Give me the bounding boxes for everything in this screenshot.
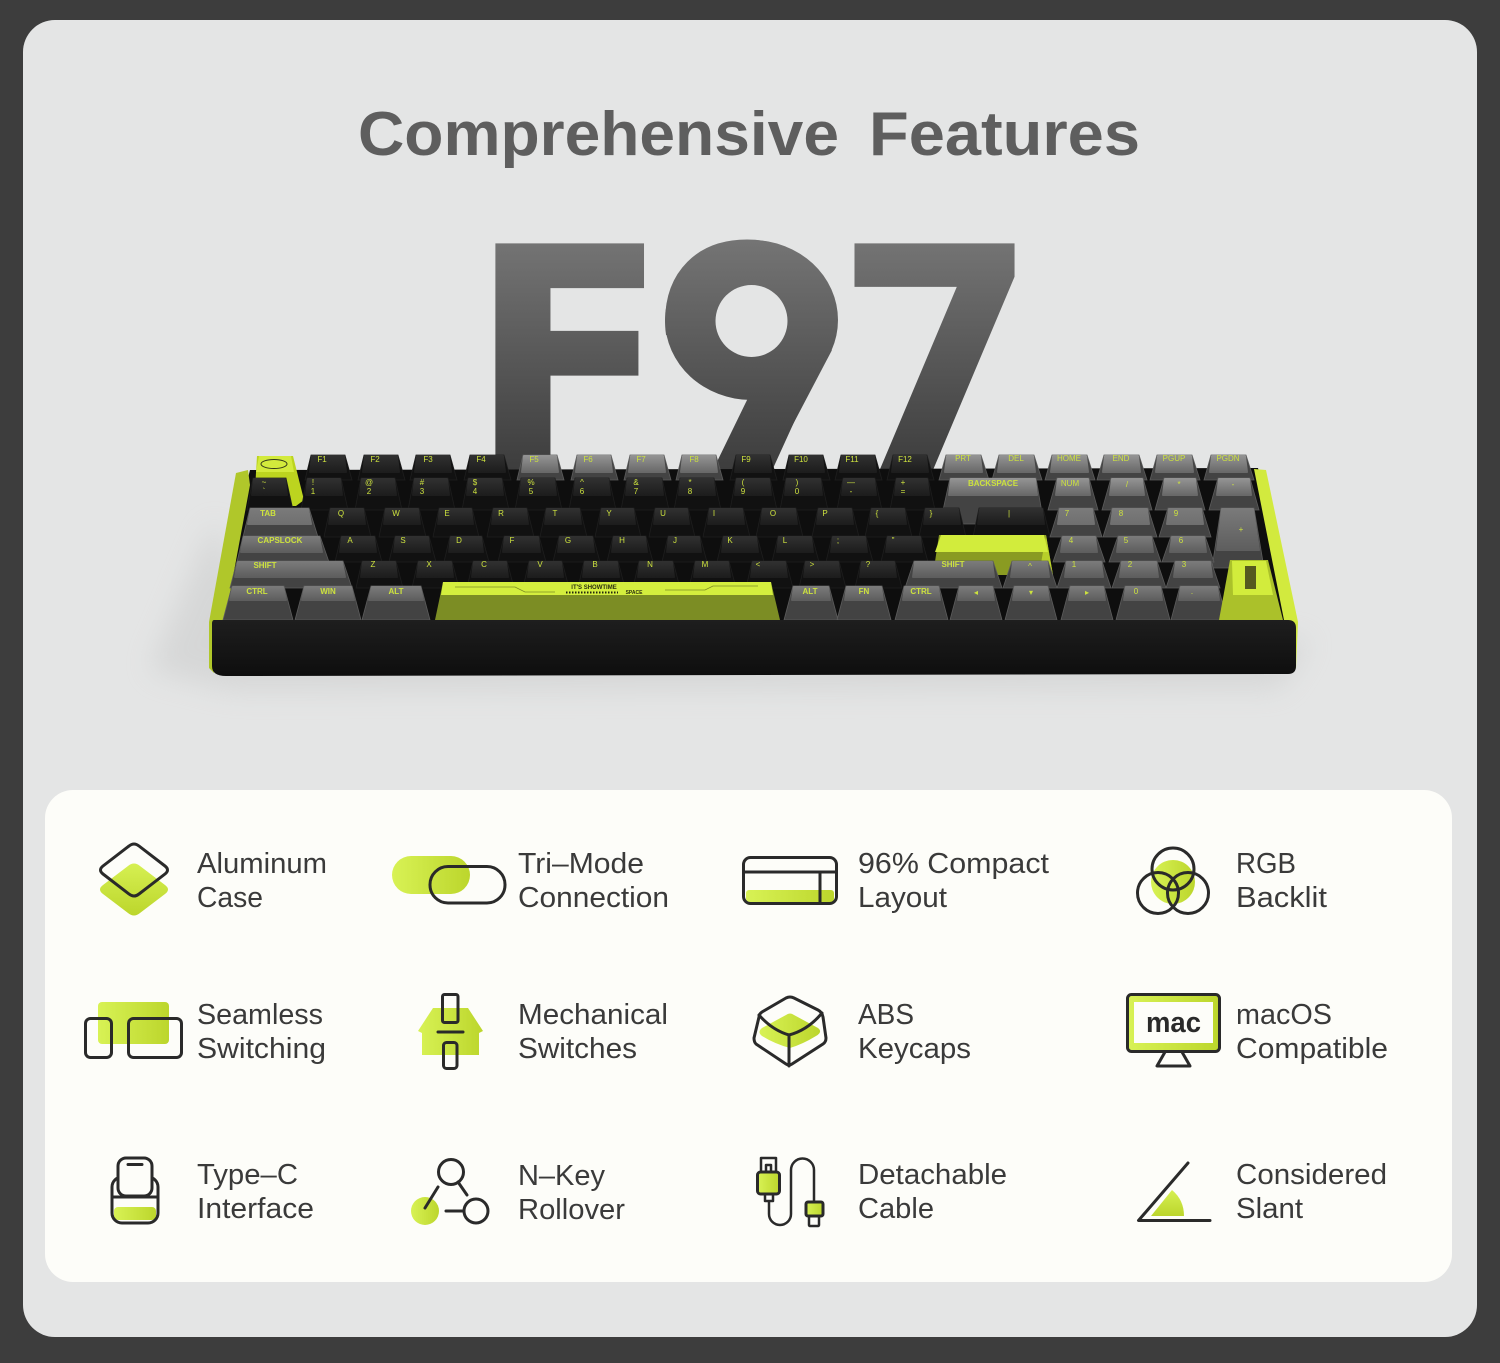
feature: Type-C Interface: [112, 1158, 314, 1225]
icon: overlapping circles: [1138, 848, 1208, 914]
keyboard front edge: [212, 620, 1296, 676]
function row keys: F5: [529, 455, 539, 464]
home row keys: J: [673, 536, 677, 545]
QWERTY row keys: 9: [1174, 509, 1179, 518]
bottom alpha row keys: >: [810, 560, 815, 569]
bottom alpha row keys: 1: [1072, 560, 1077, 569]
bottom row keys: ALT: [803, 587, 818, 596]
bottom row keys: 0: [1134, 587, 1139, 596]
bottom alpha row keys: 3: [1182, 560, 1187, 569]
number row keys: 4: [473, 487, 478, 496]
feature: Seamless Switching: [86, 999, 326, 1065]
home row keys: ;: [837, 536, 839, 545]
number row keys: ^: [580, 478, 584, 487]
number row keys: &: [633, 478, 639, 487]
label: Connection: [518, 882, 669, 914]
icon: keyboard layout: [744, 858, 836, 904]
number row keys: 9: [741, 487, 746, 496]
keyboard shadow: [150, 520, 1310, 690]
label: [518, 1160, 625, 1226]
QWERTY row keys: U: [660, 509, 666, 518]
icon: connected nodes: [411, 1160, 488, 1225]
model name: F97: [468, 180, 1038, 548]
bottom alpha row keys: <: [756, 560, 761, 569]
label: Interface: [197, 1193, 314, 1225]
number row keys: (: [742, 478, 745, 487]
label: ABS: [858, 999, 914, 1031]
home row keys: D: [456, 536, 462, 545]
label: Type–C: [197, 1159, 298, 1191]
label: Backlit: [1236, 882, 1327, 914]
bottom alpha row keys: C: [481, 560, 487, 569]
icon: stacked layers: [100, 844, 168, 916]
label: [1236, 999, 1388, 1065]
QWERTY row keys: 7: [1065, 509, 1070, 518]
bottom row keys: WIN: [320, 587, 336, 596]
bottom alpha row keys: SHIFT: [941, 560, 965, 569]
number row keys: BACKSPACE: [968, 479, 1019, 488]
number row keys: 8: [688, 487, 693, 496]
bottom alpha row keys: Z: [371, 560, 376, 569]
function row keys: DEL: [1008, 454, 1024, 463]
number row keys: NUM: [1061, 479, 1079, 488]
icon: mac monitor: mac: [1146, 1007, 1201, 1039]
number row keys: —: [847, 478, 855, 487]
keyboard illustration: [150, 454, 1310, 690]
label: Slant: [1236, 1193, 1303, 1225]
label: Detachable: [858, 1159, 1007, 1191]
function row keys: HOME: [1057, 454, 1081, 463]
label: Compatible: [1236, 1033, 1388, 1065]
numpad enter key: [1219, 560, 1283, 620]
label: [518, 999, 668, 1065]
QWERTY row keys: P: [822, 509, 828, 518]
QWERTY row keys: |: [1008, 509, 1010, 518]
function row keys: F1: [317, 455, 327, 464]
label: Cable: [858, 1193, 934, 1225]
function row keys: F6: [583, 455, 593, 464]
number row keys: #: [420, 478, 425, 487]
label: [858, 999, 971, 1065]
label: Aluminum: [197, 848, 327, 880]
QWERTY row keys: O: [770, 509, 776, 518]
bottom row keys: ▸: [1085, 588, 1089, 597]
home row keys: L: [783, 536, 788, 545]
number row keys: *: [688, 478, 692, 487]
function row keys: F3: [423, 455, 433, 464]
home row keys: A: [347, 536, 353, 545]
number row keys: ~: [262, 478, 267, 487]
label: Case: [197, 882, 263, 914]
QWERTY row keys: [243, 508, 1264, 568]
label: Switching: [197, 1033, 326, 1065]
number row keys: [247, 478, 1259, 532]
QWERTY row keys: R: [498, 509, 504, 518]
icon: USB-C plug: [112, 1158, 158, 1223]
home row keys: [237, 535, 1214, 575]
bottom alpha row keys: B: [592, 560, 598, 569]
number row keys: %: [527, 478, 535, 487]
function row keys: PGDN: [1216, 454, 1240, 463]
function row keys: F12: [898, 455, 912, 464]
QWERTY row keys: 8: [1119, 509, 1124, 518]
bottom row keys: CTRL: [246, 587, 268, 596]
home row keys: S: [400, 536, 406, 545]
label: Switches: [518, 1033, 637, 1065]
model name: F97: 9: [650, 180, 853, 548]
panel: features: [45, 790, 1452, 1282]
feature: Mechanical Switches: [418, 994, 668, 1068]
QWERTY row keys: I: [713, 509, 715, 518]
bottom alpha row keys: [230, 560, 1220, 588]
label: RGB: [1236, 848, 1296, 880]
label: [858, 848, 1049, 914]
home row keys: 6: [1179, 536, 1184, 545]
home row keys: ": [892, 536, 895, 545]
function row keys: F4: [476, 455, 486, 464]
feature: Considered Slant: [1138, 1159, 1387, 1225]
feature: N-Key Rollover: [411, 1160, 625, 1226]
label: [197, 1159, 314, 1225]
spacebar: [435, 582, 780, 620]
number row keys: 1: [311, 487, 316, 496]
QWERTY row keys: T: [553, 509, 558, 518]
label: Keycaps: [858, 1033, 971, 1065]
number row keys: `: [263, 487, 266, 496]
feature: Tri-Mode Connection: [392, 848, 669, 914]
bottom alpha row keys: SHIFT: [253, 561, 277, 570]
label: [518, 848, 669, 914]
label: [1236, 848, 1327, 914]
title: Comprehensive: [358, 100, 839, 169]
function row keys: F9: [741, 455, 751, 464]
bottom alpha row keys: 2: [1128, 560, 1133, 569]
function row keys: F8: [689, 455, 699, 464]
model name: F97: F: [468, 181, 669, 548]
function row keys: END: [1113, 454, 1130, 463]
QWERTY row keys: Q: [338, 509, 344, 518]
QWERTY row keys: TAB: [260, 509, 276, 518]
number row keys: 5: [529, 487, 534, 496]
function row keys: F10: [794, 455, 808, 464]
bottom row keys: ▾: [1029, 588, 1033, 597]
QWERTY row keys: W: [392, 509, 400, 518]
label: Considered: [1236, 1159, 1387, 1191]
bottom alpha row keys: M: [702, 560, 709, 569]
spacebar: SPACE: [626, 590, 643, 596]
function row keys: PGUP: [1163, 454, 1185, 463]
number row keys: 0: [795, 487, 800, 496]
icon: toggle: [392, 856, 505, 903]
label: N–Key: [518, 1160, 605, 1192]
title: [358, 100, 1140, 169]
model name: F97: 7: [835, 180, 1038, 548]
feature: macOS Compatible: [1128, 994, 1388, 1066]
function row keys: [254, 454, 1254, 506]
feature: ABS Keycaps: [754, 997, 971, 1066]
bottom row keys: [223, 586, 1227, 620]
keyboard top plate: [212, 468, 1296, 622]
icon: cable: [758, 1158, 823, 1226]
bottom row keys: ALT: [389, 587, 404, 596]
home row keys: K: [727, 536, 733, 545]
number row keys: ): [796, 478, 799, 487]
label: [858, 1159, 1007, 1225]
bottom row keys: FN: [859, 587, 870, 596]
home row keys: F: [510, 536, 515, 545]
label: Rollover: [518, 1194, 625, 1226]
feature: RGB Backlit: [1138, 848, 1327, 914]
bottom alpha row keys: ?: [866, 560, 871, 569]
bottom row keys: .: [1191, 587, 1193, 596]
icon: keycap: [754, 997, 826, 1066]
home row keys: 4: [1069, 536, 1074, 545]
number row keys: -: [850, 487, 853, 496]
label: Mechanical: [518, 999, 668, 1031]
label: Tri–Mode: [518, 848, 644, 880]
bottom row keys: CTRL: [910, 587, 932, 596]
bottom row keys: ◂: [974, 588, 978, 597]
label: Layout: [858, 882, 947, 914]
home row keys: 5: [1124, 536, 1129, 545]
icon: devices: [86, 1002, 182, 1058]
label: macOS: [1236, 999, 1332, 1031]
QWERTY row keys: +: [1239, 525, 1244, 534]
bottom alpha row keys: X: [426, 560, 432, 569]
function row keys: F7: [636, 455, 646, 464]
feature: 96% Compact Layout: [744, 848, 1049, 914]
QWERTY row keys: }: [930, 509, 933, 518]
bottom alpha row keys: N: [647, 560, 653, 569]
number row keys: !: [312, 478, 314, 487]
number row keys: 2: [367, 487, 372, 496]
QWERTY row keys: E: [444, 509, 450, 518]
number row keys: *: [1177, 480, 1181, 489]
icon: switch: [418, 994, 483, 1068]
label: [1236, 1159, 1387, 1225]
QWERTY row keys: {: [876, 509, 879, 518]
label: [197, 999, 326, 1065]
number row keys: 3: [420, 487, 425, 496]
icon: angle: [1138, 1163, 1210, 1220]
label: Seamless: [197, 999, 323, 1031]
function row keys: PRT: [955, 454, 971, 463]
number row keys: 6: [580, 487, 585, 496]
lime side rails: [209, 470, 250, 673]
label: 96% Compact: [858, 848, 1049, 880]
number row keys: -: [1232, 480, 1235, 489]
number row keys: /: [1126, 480, 1129, 489]
bottom alpha row keys: V: [537, 560, 543, 569]
title: Features: [869, 100, 1140, 169]
icon: mac monitor: [1128, 994, 1220, 1066]
home row keys: G: [565, 536, 571, 545]
function row keys: F11: [845, 455, 859, 464]
home row keys: CAPSLOCK: [258, 536, 303, 545]
spacebar: IT'S SHOWTIME: [571, 585, 617, 591]
feature: Detachable Cable: [758, 1158, 1007, 1226]
number row keys: +: [901, 478, 906, 487]
bottom alpha row keys: ^: [1028, 562, 1032, 571]
feature: Aluminum Case: [100, 844, 327, 916]
label: [197, 848, 327, 914]
number row keys: =: [901, 487, 906, 496]
QWERTY row keys: Y: [606, 509, 612, 518]
number row keys: @: [365, 478, 373, 487]
function row keys: F2: [370, 455, 380, 464]
number row keys: $: [473, 478, 478, 487]
number row keys: 7: [634, 487, 639, 496]
home row keys: H: [619, 536, 625, 545]
